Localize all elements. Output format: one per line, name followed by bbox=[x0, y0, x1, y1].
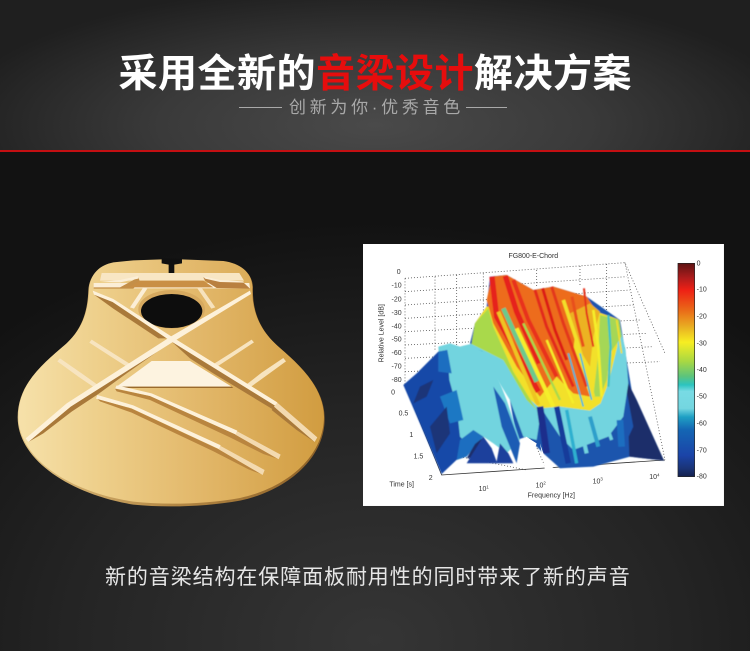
y axis labels: -30 bbox=[392, 310, 402, 317]
x axis labels: 2 bbox=[543, 481, 546, 486]
y axis labels: -20 bbox=[392, 297, 402, 304]
X brace shadow bbox=[28, 295, 315, 442]
y axis labels bbox=[378, 269, 433, 482]
x axis labels: 10 bbox=[536, 482, 543, 489]
navy right flank bbox=[623, 373, 664, 461]
neck notch bbox=[162, 259, 182, 276]
colour scale bar: -70 bbox=[697, 447, 707, 454]
colour scale bar: -80 bbox=[697, 474, 707, 481]
chart axes bbox=[405, 385, 665, 475]
lower blue streaks bbox=[540, 407, 622, 463]
3D grid walls bbox=[405, 263, 665, 470]
upper transverse brace bbox=[94, 276, 250, 289]
colour scale bar: -10 bbox=[697, 286, 707, 293]
y axis labels: 1.5 bbox=[414, 453, 423, 460]
y axis labels: Relative Level [dB] bbox=[378, 304, 385, 362]
colour scale bar: 0 bbox=[697, 260, 701, 267]
orange band bbox=[487, 275, 593, 397]
y axis labels: -50 bbox=[392, 337, 402, 344]
y axis labels: -80 bbox=[392, 377, 402, 384]
sound hole bbox=[138, 290, 205, 329]
bottom gaps in surface bbox=[525, 437, 557, 470]
green patch bbox=[472, 308, 537, 410]
guitar body bbox=[18, 259, 324, 504]
colour scale bar: -50 bbox=[697, 394, 707, 401]
caption: 新的音梁结构在保障面板耐用性的同时带来了新的声音 bbox=[105, 566, 631, 589]
x axis labels: Frequency [Hz] bbox=[528, 492, 575, 499]
y axis labels: -70 bbox=[392, 363, 402, 370]
spectrum chart panel bbox=[363, 244, 724, 506]
short struts bbox=[130, 287, 215, 309]
header band bbox=[0, 0, 750, 150]
cyan strip below stripes bbox=[480, 347, 542, 440]
colour scale bar: -40 bbox=[697, 367, 707, 374]
y axis labels: 0.5 bbox=[399, 411, 408, 418]
left low frequency surface bbox=[403, 343, 520, 474]
x axis labels: Time [s] bbox=[389, 481, 414, 488]
spectral streaks bbox=[492, 276, 622, 407]
long parallel braces bbox=[96, 385, 281, 475]
title: 采用全新的音梁设计解决方案 bbox=[118, 53, 632, 96]
y axis labels: 0 bbox=[397, 269, 401, 276]
y axis labels: 1 bbox=[409, 432, 413, 439]
chart background bbox=[363, 244, 724, 506]
deep blue base bbox=[470, 275, 664, 468]
y axis labels: -10 bbox=[392, 282, 402, 289]
x axis labels: 10 bbox=[593, 478, 600, 485]
y axis labels: 0 bbox=[391, 389, 395, 396]
cyan band bbox=[460, 327, 628, 450]
x axis labels: 4 bbox=[657, 472, 660, 477]
X brace bbox=[26, 291, 317, 442]
colour scale bar bbox=[678, 260, 707, 481]
colour scale bar: -20 bbox=[697, 313, 707, 320]
guitar body rim bbox=[18, 262, 325, 506]
y axis labels: -60 bbox=[392, 350, 402, 357]
upper plate bbox=[100, 273, 244, 281]
chart title: FG800-E-Chord bbox=[508, 253, 558, 260]
x axis labels: 10 bbox=[479, 486, 486, 493]
x axis labels: 1 bbox=[486, 484, 489, 489]
colour scale bar: -30 bbox=[697, 340, 707, 347]
red divider line bbox=[0, 150, 750, 152]
y axis labels: 2 bbox=[429, 475, 433, 482]
x axis labels: 3 bbox=[600, 477, 603, 482]
spectrum surface bbox=[460, 275, 664, 468]
y axis labels: -40 bbox=[392, 323, 402, 330]
finger braces bbox=[57, 340, 286, 389]
guitar top bracing illustration bbox=[18, 259, 325, 506]
x axis labels: 10 bbox=[649, 474, 657, 481]
subtitle: 创新为你·优秀音色 bbox=[289, 98, 464, 117]
colour scale bar: -60 bbox=[697, 420, 707, 427]
bridge plate bbox=[117, 361, 232, 387]
x axis labels bbox=[389, 472, 660, 499]
yellow band bbox=[472, 303, 618, 411]
